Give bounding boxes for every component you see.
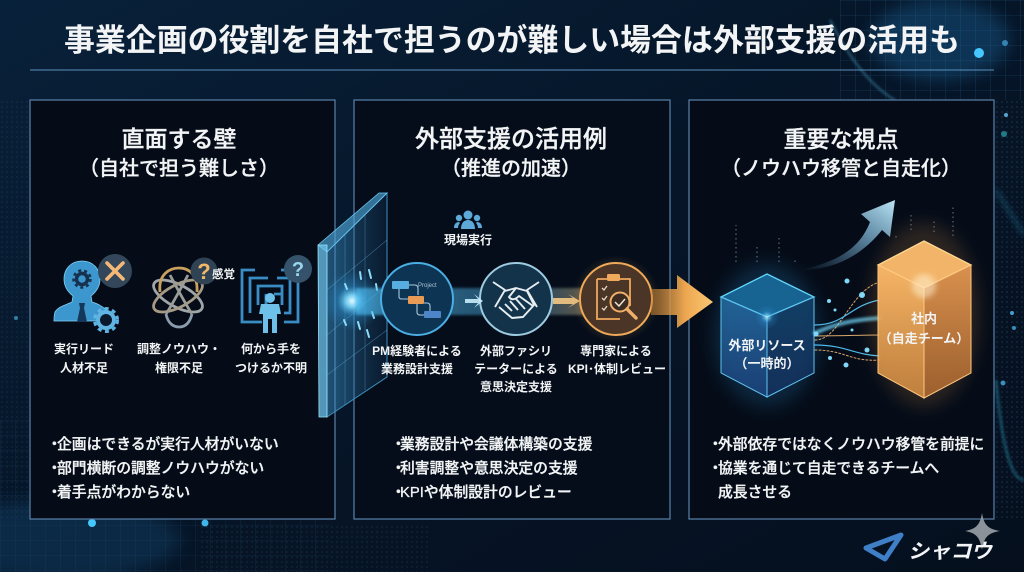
icon: cross badge xyxy=(98,254,132,288)
bullet list: viewpoint: 外部依存ではなくノウハウ移管を前提に xyxy=(718,435,984,453)
label: in-house team: （自走チーム） xyxy=(879,331,969,346)
label: PM design: PM経験者による xyxy=(372,343,462,358)
flow beam xyxy=(356,288,640,315)
bullet list: challenges: 着手点がわからない xyxy=(57,483,190,501)
bullet list: challenges: 企画はできるが実行人材がいない xyxy=(57,435,279,453)
heading: challenges: （自社で担う難しさ） xyxy=(79,157,279,180)
icon: question badge blue xyxy=(284,255,312,283)
label: field execution: 現場実行 xyxy=(444,232,492,247)
wall xyxy=(318,193,387,417)
bullet list: support: 業務設計や会議体構築の支援 xyxy=(400,435,593,453)
bullet list: viewpoint: ・ xyxy=(708,461,723,477)
circle: PM design: Project xyxy=(418,283,437,289)
icon: knot xyxy=(149,268,207,327)
bullet list: challenges: ・ xyxy=(47,485,62,501)
label: coordination shortage: 調整ノウハウ・ xyxy=(137,341,221,356)
heading: external support: 外部支援の活用例 xyxy=(415,126,607,153)
arrow: blue segment xyxy=(465,294,483,308)
label: expert review: 専門家による xyxy=(580,343,652,358)
label: unknown start: つけるか不明 xyxy=(235,361,307,375)
sparkle xyxy=(965,513,1000,550)
icon: lead shortage xyxy=(54,261,118,332)
label: facilitator: 意思決定支援 xyxy=(480,379,552,394)
icon: question badge orange: ? xyxy=(197,259,211,284)
bullet list: challenges: ・ xyxy=(47,437,62,453)
arrow: growth xyxy=(800,200,895,270)
bullet list: support: ・ xyxy=(391,461,406,477)
label: expert review: KPI･体制レビュー xyxy=(568,361,666,376)
arrow: amber segment xyxy=(553,294,580,308)
bullet list: viewpoint: ・ xyxy=(708,437,723,453)
label: facilitator: テーターによる xyxy=(474,362,558,376)
bullet list: support: ・ xyxy=(391,437,406,453)
bullet list: challenges: 部門横断の調整ノウハウがない xyxy=(57,459,264,477)
arrow: orange xyxy=(651,275,713,328)
panel: challenges xyxy=(30,100,335,519)
label: facilitator: 外部ファシリ xyxy=(480,343,552,358)
label: lead shortage: 実行リード xyxy=(54,341,114,356)
flow beam core xyxy=(356,299,640,301)
label: external resource: （一時的） xyxy=(734,356,800,371)
light streaks above cubes xyxy=(736,205,953,262)
cube: in-house team xyxy=(869,223,979,407)
circle: review xyxy=(572,255,660,343)
circle: handshake xyxy=(480,263,552,335)
icon: question badge blue: ? xyxy=(292,259,304,281)
heading: key viewpoint: 重要な視点 xyxy=(784,126,898,152)
bullet list: viewpoint: 協業を通じて自走できるチームへ xyxy=(718,460,939,477)
particle stream xyxy=(814,278,880,368)
icon: team xyxy=(454,210,482,229)
label: PM design: 業務設計支援 xyxy=(381,361,453,376)
bullet list: support: KPIや体制設計のレビュー xyxy=(400,484,572,501)
icon: question badge orange xyxy=(190,258,218,284)
title: 事業企画の役割を自社で担うのが難しい場合は外部支援の活用も xyxy=(64,23,960,58)
heading: challenges xyxy=(79,126,279,180)
cube: external resource xyxy=(713,263,821,407)
heading: external support: （推進の加速） xyxy=(441,157,581,180)
bullet list: challenges: ・ xyxy=(47,461,62,477)
panel: key viewpoint xyxy=(689,100,994,519)
heading: key viewpoint: （ノウハウ移管と自走化） xyxy=(721,157,961,180)
label: external resource: 外部リソース xyxy=(728,338,806,353)
label: in-house team: 社内 xyxy=(911,311,937,326)
bullet list: support: ・ xyxy=(391,485,406,501)
icon: maze xyxy=(242,270,298,333)
label: coordination shortage: 権限不足 xyxy=(155,360,203,375)
panel: external support xyxy=(354,100,670,519)
logo: シャコウ xyxy=(907,540,996,563)
label: lead shortage: 人材不足 xyxy=(60,360,108,375)
heading: external support xyxy=(415,126,607,180)
circle: PM design xyxy=(381,263,453,335)
logo xyxy=(866,535,996,563)
label: unknown start: 何から手を xyxy=(241,341,301,356)
bullet list: support: 利害調整や意思決定の支援 xyxy=(400,460,578,477)
heading: key viewpoint xyxy=(721,126,961,180)
heading: challenges: 直面する壁 xyxy=(122,126,236,152)
title underline xyxy=(30,69,994,71)
stray label: 感覚 xyxy=(212,267,235,281)
bullet list: viewpoint: 成長させる xyxy=(718,484,792,501)
